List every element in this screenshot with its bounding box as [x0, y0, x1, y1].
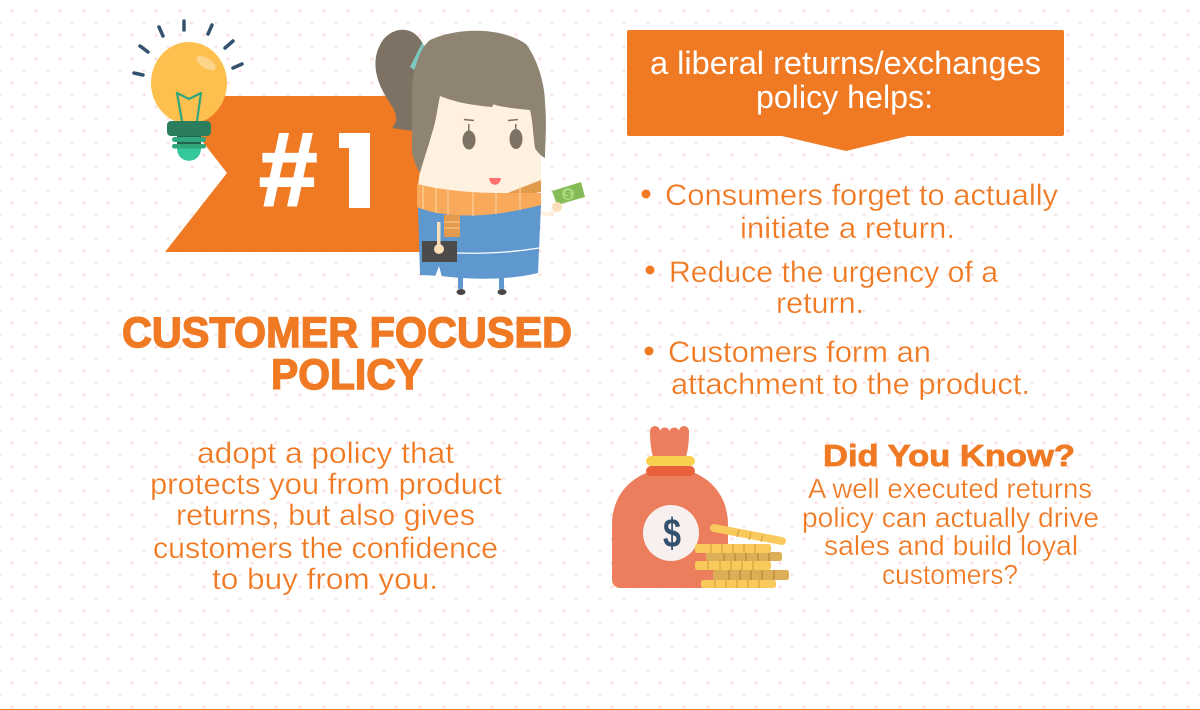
text block: did you know: policy can actually drive: [802, 502, 1099, 533]
text block: policy description: protects you from product: [150, 468, 503, 501]
heading: customer focused policy: CUSTOMER FOCUSED: [122, 309, 572, 357]
bullet list: benefits: attachment to the product.: [671, 368, 1030, 401]
bullet list: benefits: [642, 179, 1058, 401]
text block: policy description: adopt a policy that: [197, 437, 455, 470]
text block: policy description: returns, but also gives: [176, 499, 475, 532]
character: girl holding money: [375, 30, 585, 295]
bullet list: benefits: initiate a return.: [740, 212, 955, 245]
text block: policy description: [150, 437, 503, 596]
icon: light bulb: [134, 21, 242, 161]
ribbon banner with #1: [165, 96, 425, 252]
bullet list: benefits: Consumers forget to actually: [665, 179, 1058, 212]
text block: policy description: to buy from you.: [212, 563, 438, 596]
icon: money bag and coins: $: [663, 510, 681, 556]
number one label: #: [259, 112, 317, 228]
text block: did you know: [802, 438, 1099, 590]
bullet list: benefits: Reduce the urgency of a: [669, 256, 998, 289]
number one label: [260, 133, 370, 208]
text block: did you know: customers?: [882, 559, 1018, 590]
callout: returns policy header: a liberal returns/exchanges: [650, 45, 1041, 81]
heading: customer focused policy: POLICY: [271, 351, 423, 399]
callout: returns policy header: [627, 30, 1064, 151]
coin stack: [695, 528, 789, 588]
heading: customer focused policy: [122, 309, 572, 399]
character: girl holding money: $: [565, 190, 571, 201]
number one label: 1: [329, 112, 387, 228]
bullet list: benefits: return.: [776, 287, 864, 320]
bullet list: benefits: Customers form an: [668, 336, 931, 369]
text block: policy description: customers the confidence: [153, 532, 498, 565]
text block: did you know: sales and build loyal: [824, 530, 1078, 561]
icon: money bag and coins: [612, 426, 789, 588]
callout: returns policy header: policy helps:: [756, 79, 933, 115]
text block: did you know: A well executed returns: [808, 473, 1092, 504]
did you know heading: Did You Know?: [823, 438, 1075, 473]
